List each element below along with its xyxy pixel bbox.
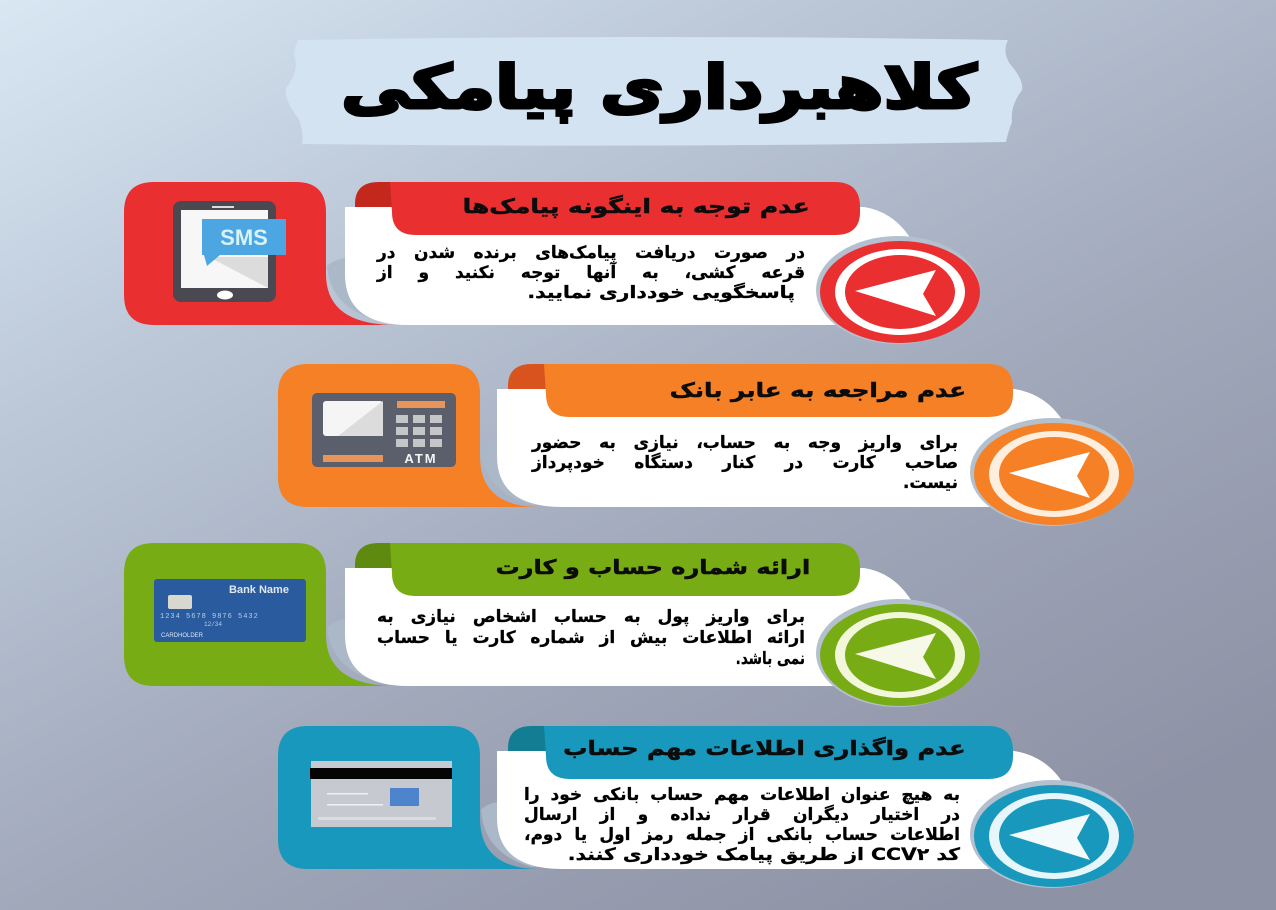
heading: ارائه شماره حساب و کارت bbox=[495, 555, 810, 579]
text block bbox=[376, 243, 805, 303]
text block: به هیچ عنوان اطلاعات مهم حساب بانکی خود را bbox=[524, 785, 960, 805]
title banner bbox=[286, 37, 1022, 146]
text block: نمی باشد. bbox=[736, 649, 805, 669]
text block: ارائه اطلاعات بیش از شماره کارت یا حساب bbox=[377, 628, 805, 648]
icon panel: bank card bbox=[124, 543, 980, 707]
icon panel: SMS phone bbox=[124, 182, 980, 344]
icon panel: card back bbox=[278, 726, 1134, 888]
panel: SMS warning bbox=[124, 182, 980, 344]
icon panel: bank card: 12/34 bbox=[204, 621, 222, 628]
panel: ATM bbox=[278, 364, 1134, 526]
text block bbox=[377, 607, 805, 669]
icon panel: bank card: CARDHOLDER bbox=[161, 633, 204, 639]
panel: account and card number bbox=[124, 543, 980, 707]
text block: قرعه کشی، به آنها توجه نکنید و از bbox=[377, 263, 805, 283]
icon panel: bank card: 1234 5678 9876 5432 bbox=[160, 613, 259, 621]
heading: عدم واگذاری اطلاعات مهم حساب bbox=[563, 736, 966, 760]
icon panel: ATM: ATM bbox=[404, 451, 438, 466]
text block: کد CCV۲ از طریق پیامک خودداری کنند. bbox=[568, 845, 960, 865]
heading: عدم توجه به اینگونه پیامک‌ها bbox=[463, 194, 810, 218]
panel: sensitive account information bbox=[278, 726, 1134, 888]
text block: در اختیار دیگران قرار نداده و از ارسال bbox=[524, 805, 960, 825]
text block bbox=[531, 433, 958, 493]
text block: پاسخگویی خودداری نمایید. bbox=[527, 283, 795, 303]
text block: اطلاعات حساب بانکی از جمله رمز اول یا دوم، bbox=[524, 825, 960, 845]
text block: صاحب کارت در کنار دستگاه خودپرداز bbox=[532, 453, 958, 473]
text block: در صورت دریافت پیامک‌های برنده شدن در bbox=[377, 243, 805, 263]
icon panel: bank card: Bank Name bbox=[229, 584, 289, 596]
heading: عدم مراجعه به عابر بانک bbox=[670, 378, 966, 402]
icon panel: SMS phone: SMS bbox=[220, 225, 268, 250]
text block: برای واریز وجه به حساب، نیازی به حضور bbox=[532, 433, 958, 453]
text block: نیست. bbox=[903, 473, 958, 493]
title: کلاهبرداری پیامکی bbox=[341, 53, 977, 123]
icon panel: ATM bbox=[278, 364, 1134, 526]
text block: برای واریز پول به حساب اشخاص نیازی به bbox=[377, 607, 805, 627]
text block bbox=[524, 785, 960, 865]
